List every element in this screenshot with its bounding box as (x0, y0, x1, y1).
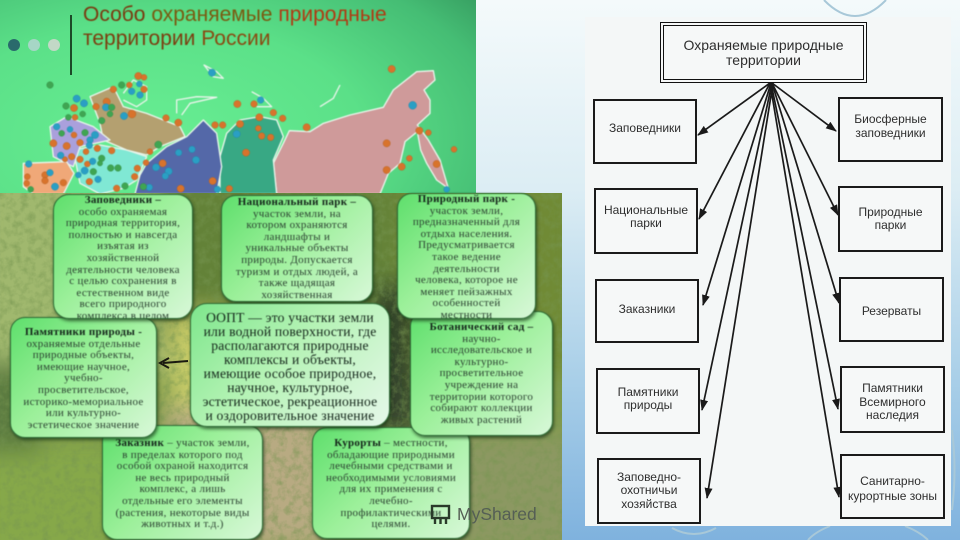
callout: национальный парк: Национальный парк – (238, 196, 356, 208)
box: заказники (595, 279, 699, 343)
callout: памятники природы: или культурно- (46, 407, 121, 419)
box: заповедно-охотничьи хозяйства: хозяйства (621, 497, 677, 511)
box: памятники всемирного наследия: Всемирного (859, 395, 926, 409)
callout: ботанический сад: научно- (462, 333, 501, 345)
box: национальные парки (594, 188, 698, 254)
callout: заказник: комплекс, а лишь (139, 483, 226, 495)
callout: ботанический сад: просветительное (440, 367, 523, 379)
callout: заповедники: всего природного (80, 298, 166, 310)
callout: курорты: лечебно- (369, 495, 413, 507)
callout: заповедники: естественном виде (76, 287, 170, 299)
callout: природный парк: особенностей (432, 297, 501, 309)
callout: национальный парк: ландшафты и (264, 231, 330, 243)
callout: заказник: Заказник – участок земли, (115, 437, 250, 449)
box: заповедно-охотничьи хозяйства (597, 458, 701, 524)
callout: памятники природы: учебно- (64, 372, 103, 384)
callout: памятники природы (10, 317, 157, 438)
callout: курорты: обладающие природными (327, 449, 455, 461)
callout: национальный парк: участок земли, на (253, 208, 341, 220)
callout: природный парк: участок земли, (430, 205, 503, 217)
callout: курорты: целями. (371, 518, 410, 530)
callout: заказник: в пределах которого под (122, 449, 243, 461)
callout: памятники природы: имеющие научное, (37, 361, 130, 373)
panel: forest photo background (0, 193, 562, 540)
callout: памятники природы: просветительское, (38, 384, 129, 396)
box: памятники всемирного наследия: Памятники (862, 381, 923, 395)
callout: заповедники: деятельности человека (66, 264, 180, 276)
title: территории России (83, 26, 270, 50)
box: заповедно-охотничьи хозяйства: охотничьи (621, 483, 677, 497)
top box: охраняемые природные территории: территории (726, 52, 801, 68)
box: памятники всемирного наследия (840, 366, 945, 433)
callout: курорты: Курорты – местности, (334, 437, 448, 449)
callout: заказник: не весь природный (135, 472, 230, 484)
decorative bubbles (672, 0, 956, 540)
box: резерваты (839, 277, 944, 342)
box: памятники природы: Памятники (618, 384, 678, 398)
callout: национальный парк: хозяйственная (261, 289, 333, 301)
map of Russia with protected area markers (22, 64, 458, 193)
callout: definition of ООПТ: научное, культурное, (227, 380, 353, 395)
callout: памятники природы: Памятники природы - (25, 326, 142, 338)
callout: курорты: для их применения с (339, 483, 443, 495)
panel: protected territories map slide (0, 0, 476, 194)
callout: заповедники: полностью и навсегда (69, 229, 177, 241)
box: санитарно-курортные зоны: курортные зоны (848, 488, 937, 502)
callout: курорты (312, 427, 470, 539)
title (82, 3, 387, 50)
callout: природный парк: отдыха населения. (421, 228, 512, 240)
callout: национальный парк: туризм и отдых людей, а (236, 266, 358, 278)
watermark: MyShared: MyShared (457, 504, 537, 524)
callout: национальный парк: котором охраняются (246, 219, 348, 231)
box: памятники природы (596, 368, 700, 434)
box: резерваты: Резерваты (862, 304, 921, 318)
callout: заказник: особой охраной находится (117, 460, 248, 472)
callout: памятники природы: природные объекты, (33, 349, 134, 361)
callout: ботанический сад (410, 311, 553, 436)
callout: заказник: отдельные его элементы (122, 495, 243, 507)
box: санитарно-курортные зоны (840, 454, 945, 519)
box: биосферные заповедники: Биосферные (854, 112, 927, 126)
callout: национальный парк (221, 195, 373, 302)
callout: ботанический сад: учреждение на (445, 379, 518, 391)
box: биосферные заповедники: заповедники (855, 126, 926, 140)
callout: definition of ООПТ: комплексы и объекты, (224, 352, 356, 367)
callout: национальный парк: также щадящая (259, 277, 335, 289)
callout: заказник: (растения, некоторые виды (115, 507, 250, 519)
box: природные парки: Природные (858, 204, 922, 218)
callout: природный парк (397, 193, 536, 319)
box: биосферные заповедники (838, 97, 943, 162)
box: заповедники (593, 99, 697, 164)
callout: заповедники: природная территория, (66, 217, 180, 229)
callout: заповедники (53, 194, 193, 319)
callout: курорты: лечебными средствами и (329, 460, 453, 472)
callout: definition of ООПТ: ООПТ — это участки земли (206, 310, 374, 325)
arrows from top box to categories (697, 83, 840, 499)
callout: ботанический сад: исследовательское и (431, 344, 532, 356)
callout: национальный парк: природы. Допускается (241, 254, 353, 266)
arrow between callouts (158, 357, 188, 369)
callout: памятники природы: историко-мемориальное (23, 396, 144, 408)
box: памятники всемирного наследия: наследия (866, 408, 919, 422)
callout: ботанический сад: Ботанический сад – (430, 321, 533, 333)
top box: охраняемые природные территории (660, 22, 867, 83)
box: заповедники: Заповедники (609, 121, 681, 135)
callout: заказник: животных и т.д.) (141, 518, 224, 530)
callout: definition of ООПТ (190, 303, 390, 427)
callout: definition of ООПТ: или водной поверхности, где (204, 324, 376, 339)
callout: природный парк: меняет пейзажных (420, 286, 513, 298)
box: природные парки (838, 186, 943, 252)
callout: заповедники: Заповедники – (85, 194, 161, 206)
callout: природный парк: деятельности (433, 263, 500, 275)
forest photo (0, 193, 562, 540)
callout: ботанический сад: территории которого (430, 391, 533, 403)
callout: курорты: необходимыми условиями (326, 472, 456, 484)
callout: национальный парк: уникальные объекты (245, 242, 349, 254)
callout: ботанический сад: культурно- (454, 356, 508, 368)
callout: природный парк: такое ведение (432, 251, 501, 263)
slide accent dots (8, 15, 72, 75)
callout: ботанический сад: живых растений (441, 414, 522, 426)
callout: заповедники: изъятая из (97, 240, 149, 252)
callout: ботанический сад: собирают коллекции (430, 402, 533, 414)
box: заповедно-охотничьи хозяйства: Заповедно- (617, 470, 681, 484)
callout: заповедники: хозяйственной (87, 252, 159, 264)
box: памятники природы: природы (624, 398, 672, 412)
box: природные парки: парки (875, 218, 906, 232)
callout: природный парк: предназначенный для (413, 216, 520, 228)
callout: definition of ООПТ: и оздоровительное значение (205, 408, 374, 423)
callout: памятники природы: охраняемые отдельные (26, 338, 141, 350)
callout: заповедники: особо охраняемая (79, 206, 167, 218)
callout: заказник (102, 425, 263, 540)
callout: definition of ООПТ: имеющие особое природное, (204, 366, 376, 381)
title: Особо охраняемые природные (83, 3, 387, 26)
callout: заповедники: с целью сохранения в (69, 275, 177, 287)
panel: classification diagram (585, 17, 951, 526)
callout: природный парк: человека, которое не (415, 274, 518, 286)
box: национальные парки: Национальные (604, 202, 688, 216)
callout: курорты: профилактическими (341, 507, 441, 519)
box: заказники: Заказники (619, 302, 675, 316)
callout: definition of ООПТ: располагаются природные (211, 338, 369, 353)
box: санитарно-курортные зоны: Санитарно- (860, 474, 925, 488)
callout: памятники природы: эстетическое значение (28, 419, 139, 431)
top box: охраняемые природные территории: Охраняемые природные (684, 36, 843, 52)
callout: definition of ООПТ: эстетическое, рекреационное (203, 394, 377, 409)
callout: природный парк: Предусматривается (418, 239, 515, 251)
box: национальные парки: парки (630, 216, 662, 230)
callout: природный парк: Природный парк - (418, 193, 515, 205)
